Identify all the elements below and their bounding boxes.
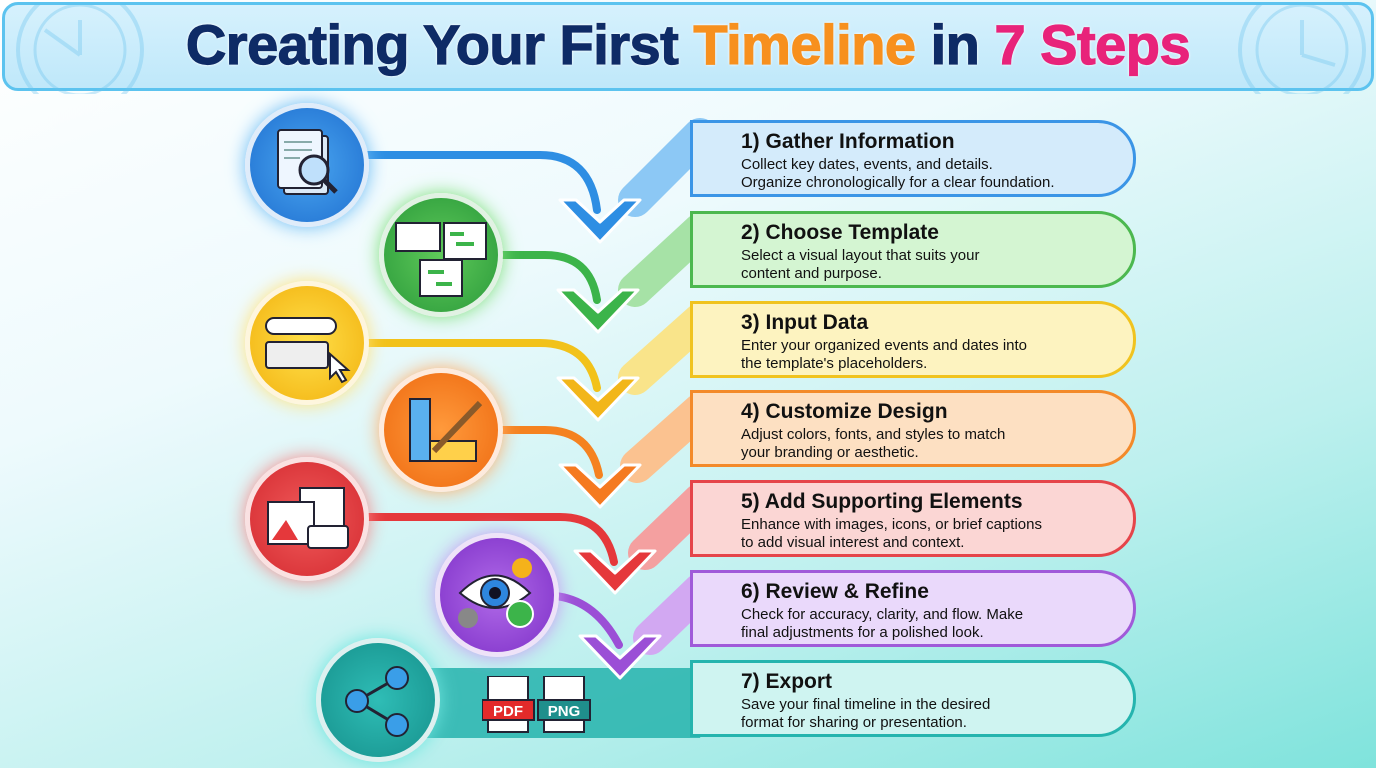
card 4 [690, 390, 1136, 467]
teal export band [380, 668, 720, 738]
card 4: Adjust colors, fonts, and styles to match [741, 426, 1005, 443]
card 1: Organize chronologically for a clear foundation. [741, 174, 1055, 191]
card 1: 1) Gather Information [741, 130, 955, 153]
card 7: 7) Export [741, 670, 832, 693]
icon circle 4: palette [379, 368, 503, 492]
title: Creating Your First Timeline in 7 Steps [186, 13, 1190, 76]
card 5 [690, 480, 1136, 557]
card 7 [690, 660, 1136, 737]
icon circle 5: images [245, 457, 369, 581]
card 5: 5) Add Supporting Elements [741, 490, 1023, 513]
card 2 [690, 211, 1136, 288]
icon circle 2: templates [379, 193, 503, 317]
icon circle 1: documents [245, 103, 369, 227]
card 7: format for sharing or presentation. [741, 714, 967, 731]
icon circle 6: eye review [435, 533, 559, 657]
card 1: Collect key dates, events, and details. [741, 156, 993, 173]
icon: PDF and PNG files: PNG [548, 703, 580, 720]
icon circle 3: keyboard search [245, 281, 369, 405]
card 3: 3) Input Data [741, 311, 868, 334]
card 2: Select a visual layout that suits your [741, 247, 979, 264]
card 1 [690, 120, 1136, 197]
card 4: 4) Customize Design [741, 400, 948, 423]
card 3 [690, 301, 1136, 378]
card 3: Enter your organized events and dates into [741, 337, 1027, 354]
card 3: the template's placeholders. [741, 355, 927, 372]
icon: PDF and PNG files [482, 676, 591, 733]
card 7: Save your final timeline in the desired [741, 696, 990, 713]
card 6: Check for accuracy, clarity, and flow. Make [741, 606, 1023, 623]
card 4: your branding or aesthetic. [741, 444, 919, 461]
icon: PDF and PNG files: PDF [493, 703, 523, 720]
card 6 [690, 570, 1136, 647]
card 2: 2) Choose Template [741, 221, 939, 244]
icon circle 7: share [316, 638, 440, 762]
card 2: content and purpose. [741, 265, 882, 282]
card 6: final adjustments for a polished look. [741, 624, 984, 641]
card 5: to add visual interest and context. [741, 534, 964, 551]
card 5: Enhance with images, icons, or brief captions [741, 516, 1042, 533]
title banner [2, 2, 1374, 91]
card 6: 6) Review & Refine [741, 580, 929, 603]
